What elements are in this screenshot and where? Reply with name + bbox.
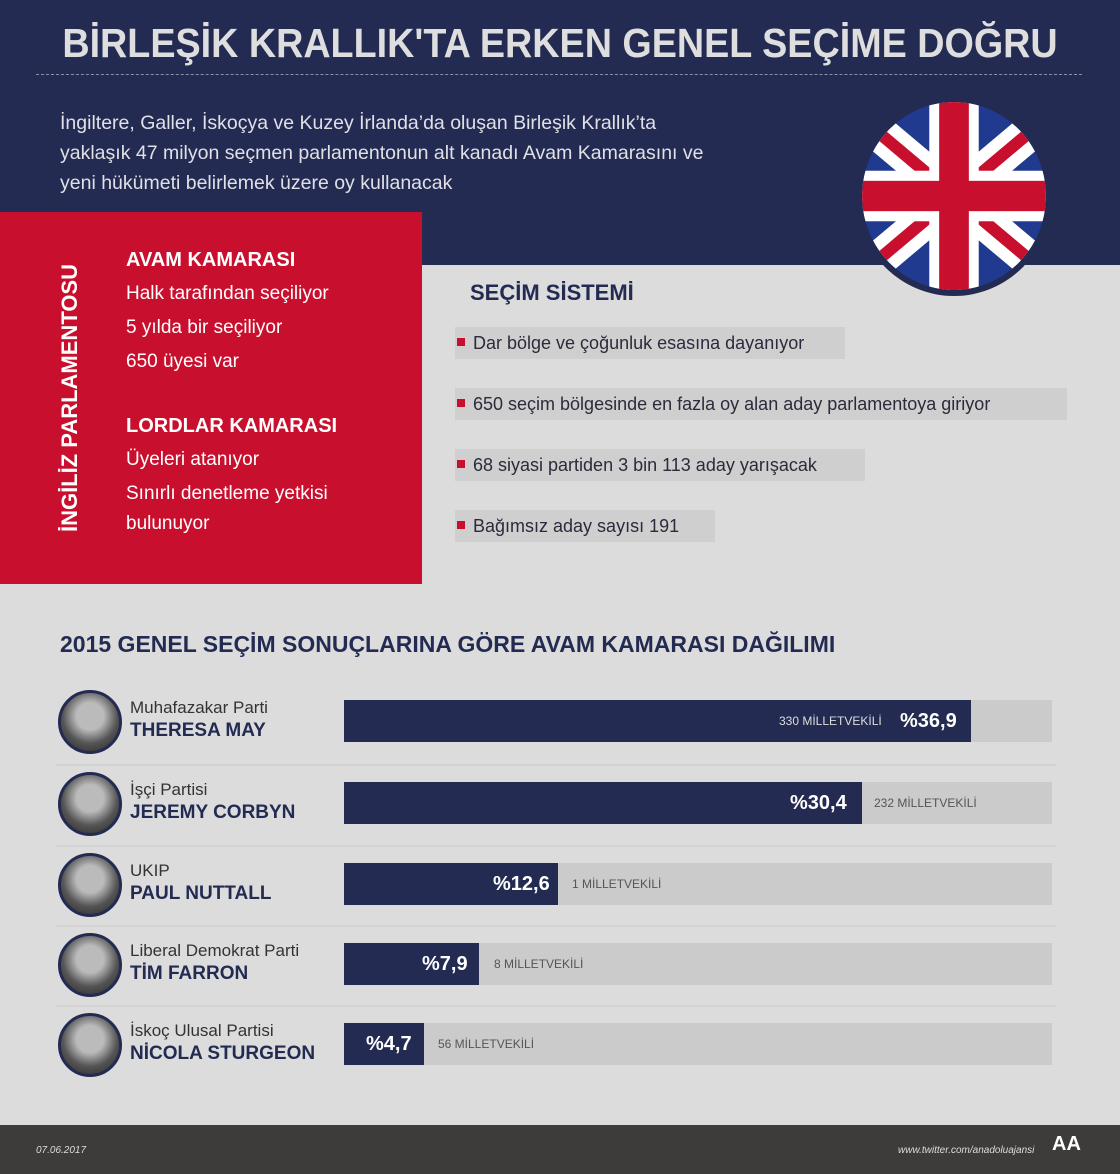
item 1: Dar bölge ve çoğunluk esasına dayanıyor <box>473 333 804 353</box>
lordlar kamarası <box>126 415 337 534</box>
item 2: 650 seçim bölgesinde en fazla oy alan aday parlamentoya giriyor <box>473 394 990 414</box>
row: May: 330 MİLLETVEKİLİ <box>779 714 882 728</box>
row: Nuttall: 1 MİLLETVEKİLİ <box>572 877 661 891</box>
row: Nuttall: UKIP <box>130 861 170 880</box>
intro text: yaklaşık 47 milyon seçmen parlamentonun alt kanadı Avam Kamarasını ve <box>60 142 703 164</box>
lordlar kamarası: Sınırlı denetleme yetkisi bulunuyor <box>126 483 328 534</box>
row: Nuttall <box>56 845 1056 925</box>
row: Corbyn: JEREMY CORBYN <box>130 802 295 823</box>
lordlar kamarası: Üyeleri atanıyor <box>126 449 259 470</box>
footer: www.twitter.com/anadoluajansi <box>898 1145 1034 1156</box>
row: Sturgeon: 56 MİLLETVEKİLİ <box>438 1037 534 1051</box>
row: Sturgeon: %4,7 <box>366 1033 412 1055</box>
avam kamarası: 5 yılda bir seçiliyor <box>126 317 282 338</box>
heading: SEÇİM SİSTEMİ <box>470 280 634 305</box>
avam kamarası: 650 üyesi var <box>126 351 239 372</box>
row: Sturgeon: İskoç Ulusal Partisi <box>130 1021 274 1040</box>
row: Corbyn: İşçi Partisi <box>130 780 207 799</box>
item 4 <box>455 510 715 542</box>
row: Farron: 8 MİLLETVEKİLİ <box>494 957 583 971</box>
row: Corbyn <box>56 764 1056 844</box>
row: Nuttall: %12,6 <box>493 873 550 895</box>
footer: 07.06.2017 <box>36 1145 86 1156</box>
row: Nuttall: PAUL NUTTALL <box>130 883 271 904</box>
intro text <box>60 112 703 194</box>
title: BİRLEŞİK KRALLIK'TA ERKEN GENEL SEÇİME DOĞRU <box>62 20 1058 66</box>
chart heading: 2015 GENEL SEÇİM SONUÇLARINA GÖRE AVAM KAMARASI DAĞILIMI <box>60 631 835 657</box>
avam kamarası: Halk tarafından seçiliyor <box>126 283 329 304</box>
lordlar kamarası: LORDLAR KAMARASI <box>126 415 337 437</box>
row: Farron: %7,9 <box>422 953 468 975</box>
row: May: %36,9 <box>900 710 957 732</box>
avam kamarası: AVAM KAMARASI <box>126 249 295 271</box>
item 3 <box>455 449 865 481</box>
row: Farron: TİM FARRON <box>130 963 248 984</box>
avam kamarası <box>126 249 329 372</box>
item 1 <box>455 327 845 359</box>
item 2 <box>455 388 1067 420</box>
row: May: THERESA MAY <box>130 720 266 741</box>
intro text: İngiltere, Galler, İskoçya ve Kuzey İrlanda’da oluşan Birleşik Krallık’ta <box>60 112 656 134</box>
icon: UK flag <box>856 96 1052 296</box>
row: May <box>58 690 1052 754</box>
row: Farron: Liberal Demokrat Parti <box>130 941 299 960</box>
item 3: 68 siyasi partiden 3 bin 113 aday yarışacak <box>473 455 817 475</box>
icon: AA logo: AA <box>1052 1133 1081 1155</box>
row: Sturgeon: NİCOLA STURGEON <box>130 1043 315 1064</box>
row: Corbyn: 232 MİLLETVEKİLİ <box>874 796 977 810</box>
row: May: Muhafazakar Parti <box>130 698 268 717</box>
item 4: Bağımsız aday sayısı 191 <box>473 516 679 536</box>
row: Corbyn: %30,4 <box>790 792 847 814</box>
bar chart <box>56 690 1056 1077</box>
row: Sturgeon <box>56 1005 1056 1085</box>
panel: parliament <box>0 212 422 584</box>
row: Farron <box>56 925 1056 1005</box>
intro text: yeni hükümeti belirlemek üzere oy kullanacak <box>60 172 452 194</box>
panel: parliament: İNGİLİZ PARLAMENTOSU <box>57 264 82 532</box>
header background <box>0 0 1120 265</box>
footer <box>0 1125 1120 1174</box>
